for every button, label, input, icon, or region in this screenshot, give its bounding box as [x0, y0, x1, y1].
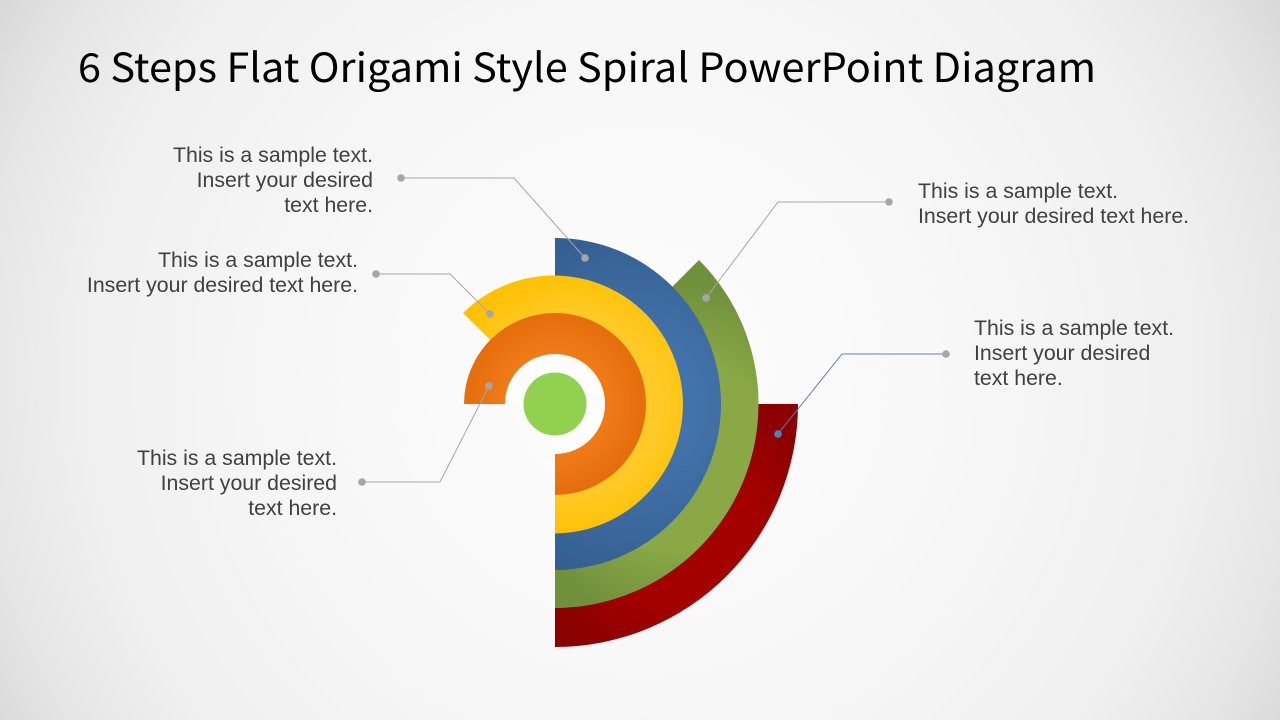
connector: right	[774, 350, 950, 438]
text block: right: text here.	[974, 366, 1063, 390]
text block: top left: This is a sample text.	[173, 143, 373, 167]
connector: middle left	[372, 270, 494, 318]
segment: blue	[555, 238, 721, 570]
text block: bottom left	[137, 446, 337, 520]
segment: orange	[464, 313, 646, 495]
text block: right	[974, 316, 1174, 390]
segment: yellow	[463, 276, 683, 534]
center hole mask for lower spiral	[505, 354, 605, 454]
text block: right: Insert your desired	[974, 341, 1150, 365]
text block: top right: Insert your desired text here.	[918, 204, 1189, 228]
text block: right: This is a sample text.	[974, 316, 1174, 340]
text block: middle left: This is a sample text.	[158, 248, 358, 272]
center circle	[524, 372, 586, 436]
connector: top left	[397, 174, 589, 262]
text block: bottom left: text here.	[248, 496, 337, 520]
text block: top left: Insert your desired	[197, 168, 373, 192]
text block: bottom left: Insert your desired	[161, 471, 337, 495]
spiral diagram	[463, 238, 798, 647]
text block: middle left: Insert your desired text here.	[87, 273, 358, 297]
title: 6 Steps Flat Origami Style Spiral PowerPoint Diagram	[78, 36, 1096, 94]
text block: bottom left: This is a sample text.	[137, 446, 337, 470]
connector: bottom left	[358, 382, 493, 486]
connector: top right	[702, 198, 893, 302]
text block: top right: This is a sample text.	[918, 179, 1118, 203]
text block: top left	[173, 143, 373, 217]
text block: middle left	[87, 248, 358, 297]
text block: top left: text here.	[284, 193, 373, 217]
text block: top right	[918, 179, 1189, 228]
segment: green	[555, 260, 759, 608]
segment: red	[555, 404, 798, 647]
